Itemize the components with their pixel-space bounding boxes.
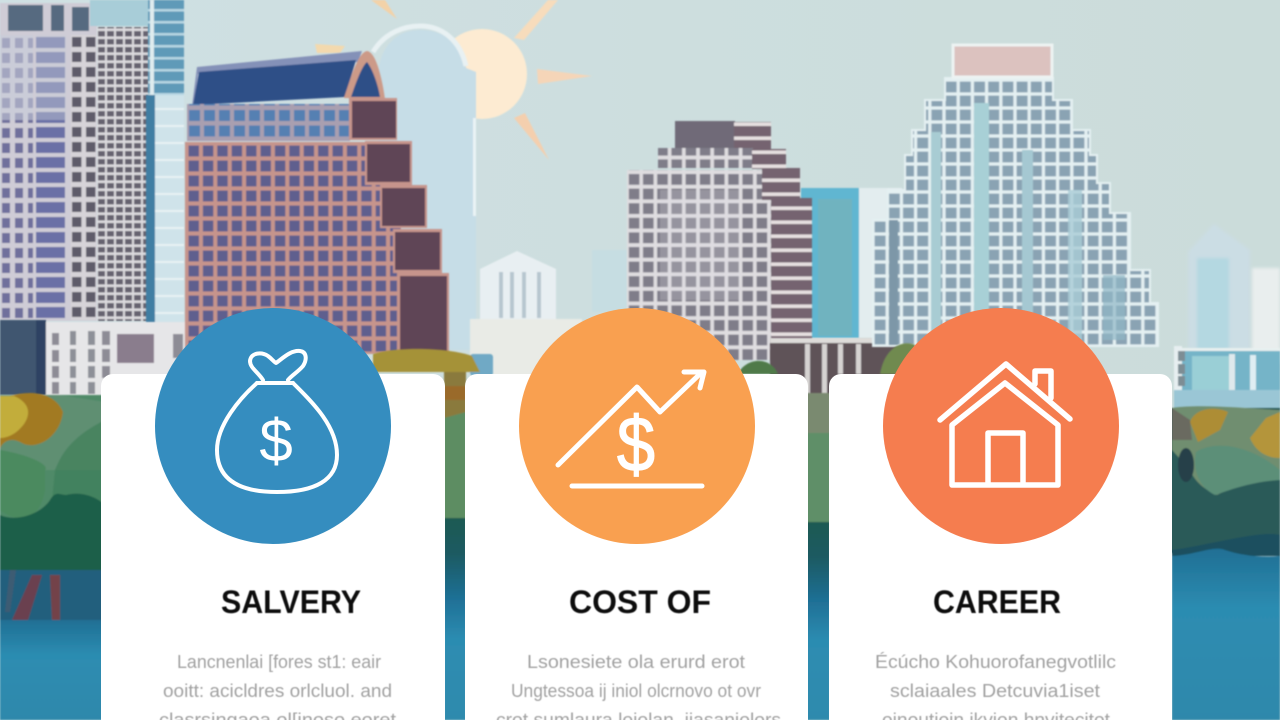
pale background tower — [373, 26, 476, 350]
building: gray office tower — [627, 121, 812, 363]
text block: career description: Écúcho Kohuorofanegvotlilc — [875, 652, 1116, 672]
building: low blue block right — [1174, 346, 1280, 414]
text block: cost of description — [496, 652, 781, 720]
building: pink stepped tower — [185, 51, 449, 355]
building: low front block left — [0, 320, 216, 407]
building: teal tower — [801, 188, 902, 338]
text block: salvery description: ooitt: acicldres orlcluol. and — [163, 681, 392, 701]
building: narrow tower — [97, 27, 149, 321]
heading: salvery: SALVERY — [221, 584, 361, 620]
heading: cost of: COST OF — [569, 584, 711, 620]
text block: salvery description: Lancnenlai [fores st1: eair — [177, 652, 381, 672]
text block: cost of description: Ungtessoa ij iniol olcrnovo ot ovr — [511, 681, 761, 701]
trees: centre gap left — [373, 349, 493, 720]
trees: left bank — [0, 393, 105, 720]
building: faint distant towers right — [1188, 224, 1280, 363]
icon: rising cost chart in orange circle — [519, 308, 755, 544]
icon: rising cost chart in orange circle: $ — [617, 400, 655, 488]
panel: salvery — [101, 374, 445, 720]
building: stepped glass tower — [873, 45, 1158, 347]
text block: career description: sclaiaales Detcuvia1iset — [890, 681, 1100, 701]
trees: right bank — [1170, 406, 1280, 720]
building: low colonnade — [770, 338, 905, 396]
panel: cost of — [465, 374, 808, 720]
panel: career — [829, 374, 1172, 720]
text block: salvery description — [159, 652, 396, 720]
text block: career description — [875, 652, 1116, 720]
icon: sun with rays — [315, 0, 592, 160]
icon: house in coral circle — [883, 308, 1119, 544]
building: white temple and base — [470, 250, 627, 379]
trees: centre gap right — [738, 343, 915, 720]
icon: money bag in blue circle — [155, 308, 391, 544]
icon: money bag in blue circle: $ — [259, 407, 293, 474]
building: round tower left — [0, 3, 97, 321]
building: blue glass tower — [90, 0, 184, 323]
text block: cost of description: Lsonesiete ola erurd erot — [527, 652, 745, 672]
heading: career: CAREER — [933, 584, 1061, 620]
